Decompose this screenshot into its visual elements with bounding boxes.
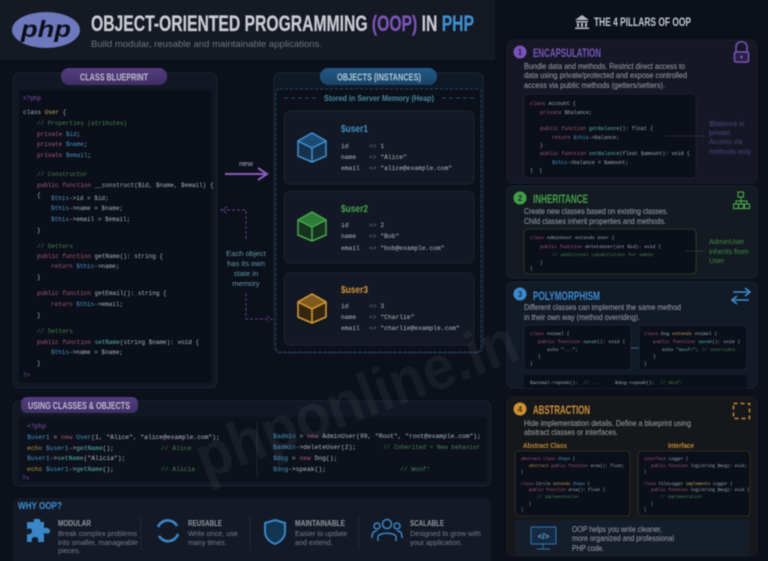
panel: class blueprint: [13, 68, 217, 388]
code: class User: $this->id = $id;: [51, 195, 109, 202]
description: abstract classes or interfaces.: [524, 428, 618, 437]
code: logger: interface Logger {: [644, 457, 689, 462]
code: logger: [638, 451, 750, 516]
code: class User: return $this->name;: [51, 263, 119, 270]
badge: 1: 1: [518, 48, 523, 57]
code: logger: class FileLogger implements Logger {: [644, 482, 733, 487]
code: admin user: public function deleteUser(int $id): void {: [540, 244, 661, 250]
code: right column: $dog = new Dog();: [273, 455, 337, 462]
code: shape: }: [521, 470, 523, 475]
note: balance private: methods only.: [709, 149, 752, 156]
code: account: return $this->balance;: [552, 135, 619, 141]
code: account: [524, 94, 696, 178]
code: dog: }: [653, 354, 656, 360]
card: user1: id: [341, 143, 349, 150]
item: scalable: SCALABLE: [410, 519, 445, 528]
card: user2: => 2: [369, 222, 384, 229]
code: logger: }: [644, 470, 646, 475]
code: dog: class Dog extends Animal {: [644, 331, 717, 337]
card: user1: $user1: [341, 123, 368, 135]
panel: polymorphism: POLYMORPHISM: [533, 289, 600, 303]
logo: php: php: [20, 16, 71, 42]
item: reusable: many times.: [188, 538, 227, 547]
icon: green cube: [298, 212, 326, 241]
panel: abstraction: [507, 397, 757, 556]
heading: why oop: WHY OOP?: [18, 500, 62, 512]
code: animal: }: [538, 354, 541, 360]
code: shape: // implementation: [537, 495, 579, 500]
code: logger: public function log(string $msg): void;: [651, 464, 747, 469]
note: adminuser inherits: inherits from: [709, 247, 749, 256]
code: logger: // implementation: [660, 495, 702, 500]
icon: people: [372, 520, 402, 541]
heading: objects: OBJECTS (INSTANCES): [337, 72, 421, 84]
code: right column: $admin = new AdminUser(99, "Root", "root@example.com");: [273, 433, 481, 440]
card: user3: => 3: [369, 303, 384, 310]
label: abstract class: Abstract Class: [523, 441, 567, 450]
code: right column: $admin->deleteUser(2);: [273, 444, 356, 451]
arrow: new: [225, 159, 267, 180]
heading: the 4 pillars: THE 4 PILLARS OF OOP: [594, 15, 691, 29]
code: shape: abstract class Shape {: [521, 457, 576, 462]
icon: monitor code: </>: [538, 532, 550, 541]
item: reusable: [158, 519, 238, 547]
item: maintainable: and extend.: [295, 538, 333, 547]
note: each object has its own state: memory: [232, 279, 260, 288]
note: adminuser inherits: AdminUser: [709, 237, 745, 246]
item: modular: [27, 519, 138, 555]
description: Child classes inherit properties and methods.: [524, 217, 666, 226]
code: right column: $dog->speak();: [273, 466, 326, 473]
panel: polymorphism: [507, 282, 757, 388]
description: Hide implementation details. Define a blueprint using: [524, 419, 691, 428]
code: admin user: }: [540, 260, 543, 266]
panel: encapsulation: [507, 40, 757, 183]
item: scalable: your application.: [410, 538, 462, 547]
code: admin user: }: [530, 266, 533, 272]
card: user3: $user3: [341, 284, 368, 296]
heading: using classes: [21, 397, 138, 413]
code: dog: [639, 325, 747, 370]
description: access via public methods (getters/setters).: [524, 81, 665, 90]
icon: cycle arrows: [158, 520, 178, 541]
note: each object has its own state: has its own: [227, 259, 265, 268]
code: class User: $this->name = $name;: [51, 349, 123, 356]
code: class User: private $name;: [37, 141, 87, 148]
card: user1: [284, 111, 474, 184]
icon: lock: [734, 42, 748, 62]
badge: 1: [514, 46, 526, 58]
description: data using private/protected and expose controlled: [524, 71, 687, 80]
badge: 3: 3: [518, 290, 523, 299]
logo: php: [12, 12, 80, 48]
code: class User: // Getters: [37, 243, 73, 250]
code: admin user: // additional capabilities for admin: [552, 252, 653, 258]
note: adminuser inherits: User: [709, 256, 725, 265]
callout: oop helps: PHP code.: [572, 544, 604, 553]
icon: hierarchy: [734, 192, 750, 208]
code: class User: private $id;: [37, 131, 80, 138]
arrow: dashed to objects: [246, 293, 272, 322]
code: class User: public function getName(): string {: [37, 253, 163, 260]
item: modular: pieces.: [58, 546, 81, 555]
code: left column: ?>: [22, 475, 30, 482]
code: animal: public function speak(): void {: [538, 339, 625, 345]
code: calls: $dog->speak(); // Woof!: [615, 380, 683, 386]
item: maintainable: [265, 519, 347, 547]
icon: blue cube: [298, 133, 326, 162]
badge: 2: 2: [518, 194, 523, 203]
code: admin user: [524, 229, 696, 274]
card: user2: email: [341, 245, 360, 252]
heading: class blueprint: CLASS BLUEPRINT: [80, 72, 148, 84]
code: admin user: class AdminUser extends User {: [530, 235, 615, 241]
item: modular: into smaller, manageable: [58, 538, 138, 547]
note: each object has its own state: Each object: [226, 249, 267, 258]
code: account: } }: [530, 168, 542, 174]
heading: objects: [320, 68, 437, 85]
card: user2: id: [341, 222, 349, 229]
code: dog: echo "Woof!"; // overrides: [662, 347, 735, 353]
code: class User: }: [37, 360, 41, 367]
icon: dashed square: [734, 404, 750, 418]
code: animal: [524, 325, 631, 370]
code: left column: // Alicia: [161, 466, 195, 473]
code: account: public function getBalance(): float {: [540, 126, 653, 132]
callout: oop helps: OOP helps you write cleaner,: [572, 525, 662, 534]
icon: orange cube: [298, 294, 326, 323]
code: class User: $this->name = $name;: [51, 205, 123, 212]
code: class User: public function setName(string $name): void {: [37, 339, 199, 346]
code: left column: // Alice: [161, 445, 191, 452]
item: reusable: Write once, use: [188, 529, 238, 538]
card: user3: => "Charlie": [369, 314, 414, 321]
card: user2: => "Bob": [369, 233, 399, 240]
item: scalable: [372, 519, 481, 547]
code: account: public function setBalance(float $amount): void {: [540, 151, 690, 157]
panel: abstraction: ABSTRACTION: [533, 403, 590, 417]
memory label: Stored in Server Memory (Heap): [324, 94, 434, 103]
code: logger: }: [651, 502, 653, 507]
code: class User: }: [37, 274, 41, 281]
code: account: class Account {: [530, 101, 576, 107]
badge: 3: [514, 288, 526, 300]
note: balance private: private.: [709, 130, 732, 137]
description: Bundle data and methods. Restrict direct access to: [524, 62, 685, 71]
card: user2: [284, 191, 474, 263]
note: each object has its own state: state in: [234, 269, 258, 278]
code: class User: private $email;: [37, 152, 91, 159]
callout: oop helps: more organized and professional: [572, 534, 674, 543]
code: class User: $this->email = $email;: [51, 216, 130, 223]
card: user3: id: [341, 303, 349, 310]
code: logger: }: [644, 508, 646, 513]
arrow: dashed to class: [221, 207, 246, 239]
description: Create new classes based on existing classes.: [524, 207, 668, 216]
code: left column: echo $user1->getName();: [27, 445, 114, 452]
item: modular: Break complex problems: [58, 529, 138, 538]
panel: why oop: [13, 498, 491, 561]
code: shape: }: [529, 502, 531, 507]
icon: monitor code: [531, 527, 556, 549]
code: class User: }: [37, 312, 41, 319]
card: user1: name: [341, 154, 356, 161]
panel: inheritance: [507, 186, 757, 278]
panel: objects: [274, 68, 483, 353]
code: class User: {: [37, 192, 41, 199]
heading: class blueprint: [61, 68, 167, 85]
icon: shield: [265, 520, 285, 544]
code: calls: [524, 375, 747, 388]
code: animal: class Animal {: [530, 331, 570, 337]
code: left column: <?php: [27, 423, 46, 430]
code: shape: public function area(): float {: [529, 488, 606, 493]
code: account: }: [540, 143, 543, 149]
arrow: new: new: [239, 159, 253, 168]
code: animal: }: [530, 361, 533, 367]
badge: 2: [514, 192, 526, 204]
code: shape: [515, 451, 630, 516]
code: shape: }: [521, 508, 523, 513]
code: class User: public function getEmail(): string {: [37, 290, 167, 297]
code: class User: // Constructor: [37, 171, 88, 178]
card: user3: name: [341, 314, 356, 321]
card: user2: name: [341, 233, 356, 240]
item: modular: MODULAR: [58, 519, 91, 528]
code: left column: $user1 = new User(1, "Alice", "alice@example.com");: [27, 434, 220, 441]
code: class User: // Properties (atributes): [37, 120, 127, 127]
description: in their own way (method overriding).: [524, 313, 640, 322]
code: class User: ?>: [23, 372, 31, 379]
item: scalable: Designed to grow with: [410, 529, 481, 538]
code: shape: class Circle extends Shape {: [521, 482, 590, 487]
card: user1: email: [341, 165, 360, 172]
code: dog: public function speak(): void {: [653, 339, 740, 345]
code: right column: [273, 433, 481, 473]
label: interface: Interface: [668, 441, 694, 450]
code: logger: public function log(string $msg): void {: [651, 488, 750, 493]
watermark: phponline.in: [185, 307, 527, 493]
subtitle: Build modular, reusable and maintainable applications.: [91, 39, 322, 50]
code: dog: }: [644, 361, 647, 367]
card: user1: => 1: [369, 143, 384, 150]
card: user1: => "alice@example.com": [369, 165, 452, 172]
code: class User: <?php: [23, 95, 41, 102]
item: reusable: REUSABLE: [188, 519, 223, 528]
icon: puzzle: [27, 519, 50, 542]
code: class User: public function __construct($id, $name, $email) {: [37, 182, 214, 189]
note: balance private: $balance is: [709, 121, 745, 128]
code: class User: }: [37, 227, 41, 234]
code: right column: // Woof!: [400, 466, 430, 473]
code: calls: $animal->speak(); // ...: [530, 380, 600, 386]
code: shape: abstract public function area(): float;: [529, 464, 625, 469]
code: class User: return $this->email;: [51, 301, 123, 308]
code: left column: [22, 423, 220, 482]
code: left column: echo $user1->getName();: [27, 466, 114, 473]
note: balance private: Access via: [709, 139, 743, 146]
panel: inheritance: INHERITANCE: [533, 192, 588, 206]
item: maintainable: MAINTAINABLE: [295, 519, 346, 528]
card: user2: => "bob@example.com": [369, 245, 445, 252]
panel: using classes and objects: [13, 397, 491, 486]
callout: oop helps: [515, 520, 750, 555]
code: animal: echo "...";: [547, 347, 578, 353]
badge: 4: 4: [518, 405, 523, 414]
heading: using classes: USING CLASSES & OBJECTS: [28, 401, 130, 412]
code: right column: // Inherited + New behavior: [383, 444, 480, 451]
heading: the 4 pillars: [575, 15, 691, 29]
badge: 4: [514, 402, 526, 416]
code: account: $this->balance = $amount;: [552, 160, 628, 166]
code: left column: $user1->setName("Alicia");: [27, 455, 125, 462]
card: user2: $user2: [341, 203, 368, 215]
code: account: private $balance;: [540, 110, 592, 116]
code: class User: [23, 95, 214, 379]
card: user3: => "charlie@example.com": [369, 325, 460, 332]
code: class User: class User {: [23, 109, 67, 116]
icon: pillars: [575, 15, 589, 29]
code: class User: // Setters: [37, 328, 73, 335]
item: maintainable: Easier to update: [295, 529, 347, 538]
title: OBJECT-ORIENTED PROGRAMMING (OOP) IN PHP: [91, 11, 474, 36]
panel: encapsulation: ENCAPSULATION: [533, 46, 601, 60]
card: user3: [284, 273, 474, 345]
icon: swap arrows: [732, 288, 750, 304]
card: user3: email: [341, 325, 360, 332]
card: user1: => "Alice": [369, 154, 407, 161]
description: Different classes can implement the same method: [524, 303, 681, 312]
